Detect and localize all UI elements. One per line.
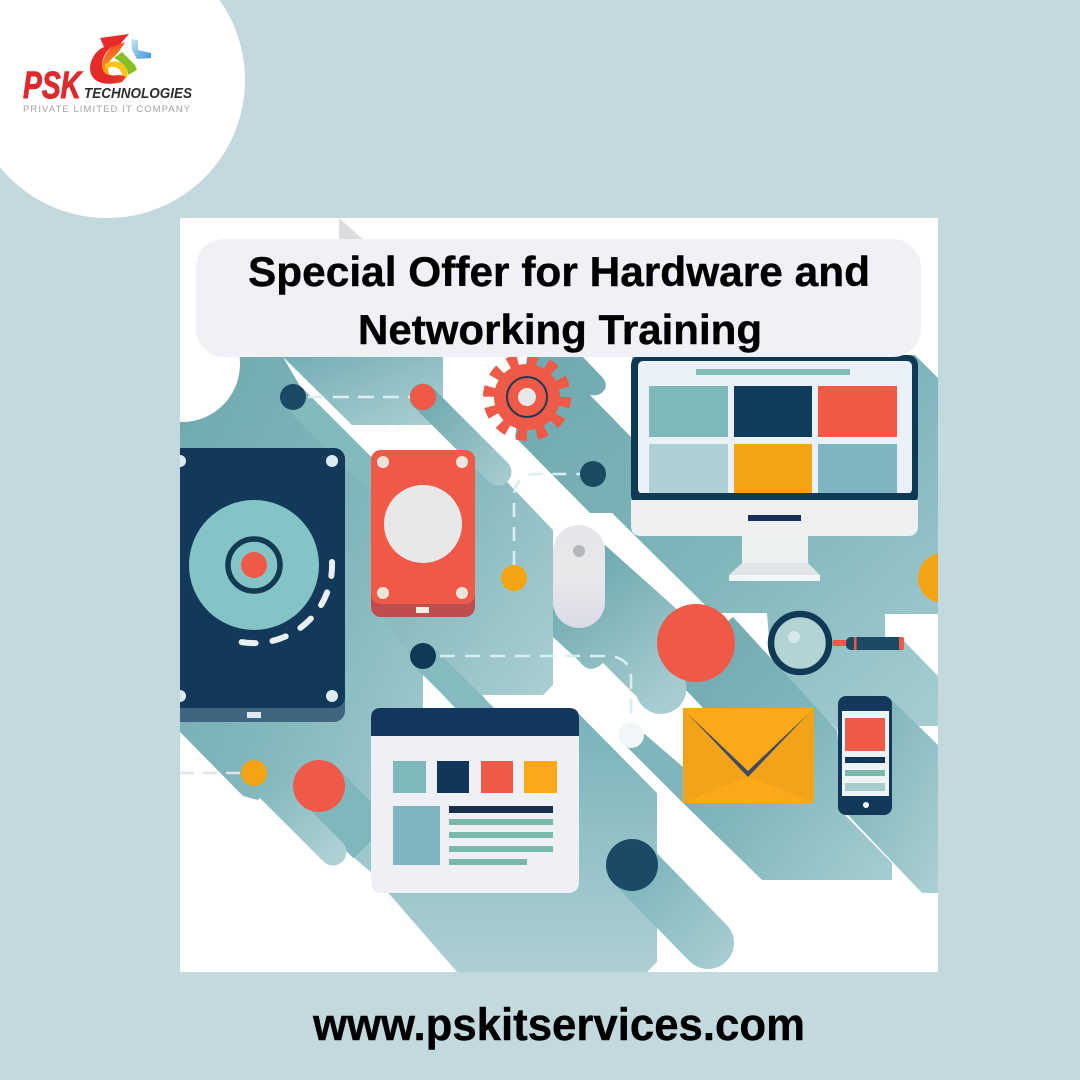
browser window bbox=[371, 708, 579, 893]
long diagonal shadows bbox=[180, 355, 938, 972]
title text line 2: Networking Training bbox=[358, 306, 762, 353]
title text line 1: Special Offer for Hardware and bbox=[248, 248, 870, 295]
website URL: www.pskitservices.com bbox=[312, 999, 805, 1050]
logo panel: white circle bbox=[0, 0, 245, 218]
logo tagline: PRIVATE LIMITED IT COMPANY bbox=[23, 104, 191, 115]
title banner bbox=[196, 239, 921, 357]
logo wordmark Technologies: TECHNOLOGIES bbox=[84, 86, 192, 102]
logo swirl icon bbox=[90, 34, 151, 84]
illustration panel: hardware and networking bbox=[180, 218, 938, 972]
red drive plate bbox=[371, 450, 475, 617]
logo wordmark PSK: PSK bbox=[23, 65, 83, 107]
desktop monitor bbox=[631, 355, 918, 581]
gear icon bbox=[490, 360, 564, 434]
envelope icon bbox=[683, 708, 814, 803]
magnifying glass bbox=[771, 614, 904, 672]
paper corner bbox=[339, 218, 362, 239]
smartphone bbox=[838, 696, 892, 815]
logo: PSK Technologies bbox=[23, 34, 192, 115]
dashed connector lines bbox=[180, 397, 631, 773]
connector dots and circles bbox=[241, 384, 968, 891]
computer mouse bbox=[553, 525, 605, 628]
white blob circle bbox=[180, 357, 240, 422]
hard drive bbox=[180, 448, 345, 722]
